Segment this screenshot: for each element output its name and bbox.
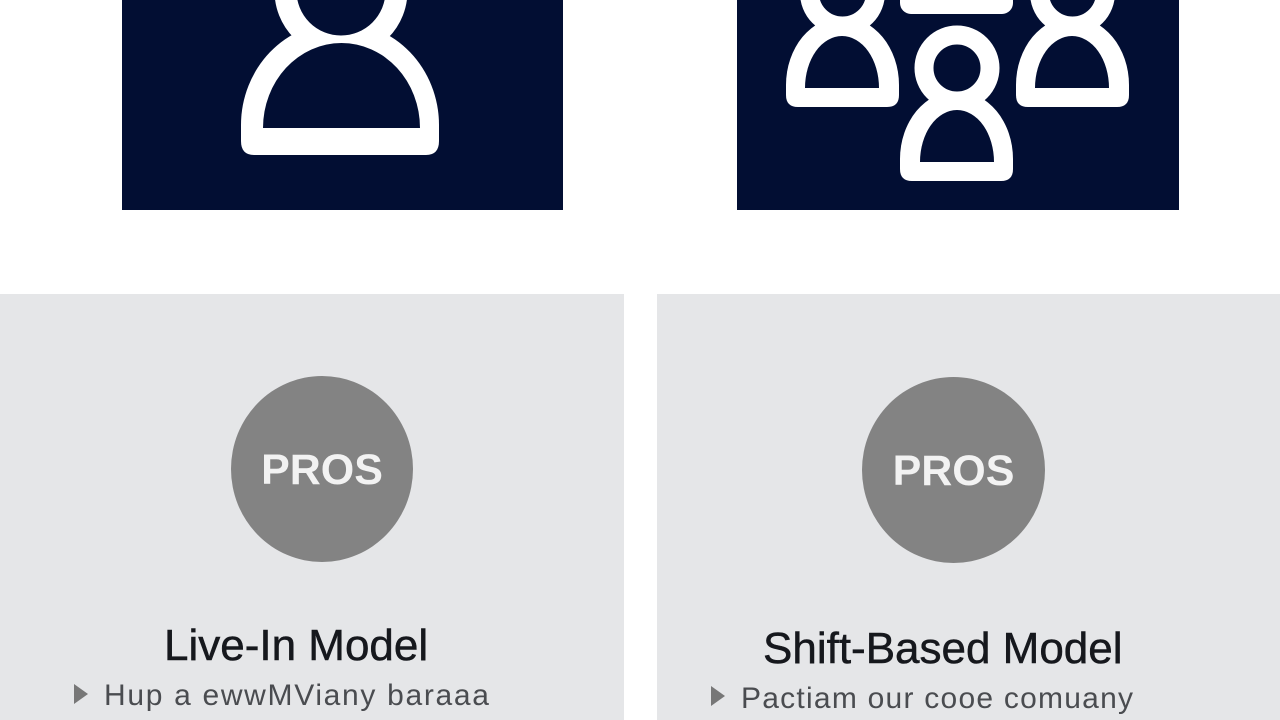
icon: single person — [241, 0, 439, 155]
panel: shift-based model pros — [657, 294, 1280, 720]
panel: shift-based icon — [737, 0, 1179, 210]
icon: bullet arrow — [74, 684, 88, 704]
bullet: shift-based — [711, 682, 1134, 715]
icon: bullet arrow — [711, 686, 725, 706]
bullet text: Pactiam our cooe comuany — [741, 682, 1134, 715]
heading: live-in model: Live-In Model — [164, 621, 428, 670]
badge label: PROS — [261, 446, 383, 494]
icon: group of people — [786, 0, 1129, 181]
badge: pros — [231, 376, 413, 562]
bullet: live-in — [74, 679, 491, 712]
panel: live-in icon — [122, 0, 563, 210]
panel: live-in model pros — [0, 294, 624, 720]
badge: pros — [862, 377, 1045, 563]
badge label: PROS — [893, 447, 1014, 495]
heading: shift-based model: Shift-Based Model — [763, 624, 1123, 673]
bullet text: Hup a ewwMViany baraaa — [104, 679, 491, 712]
